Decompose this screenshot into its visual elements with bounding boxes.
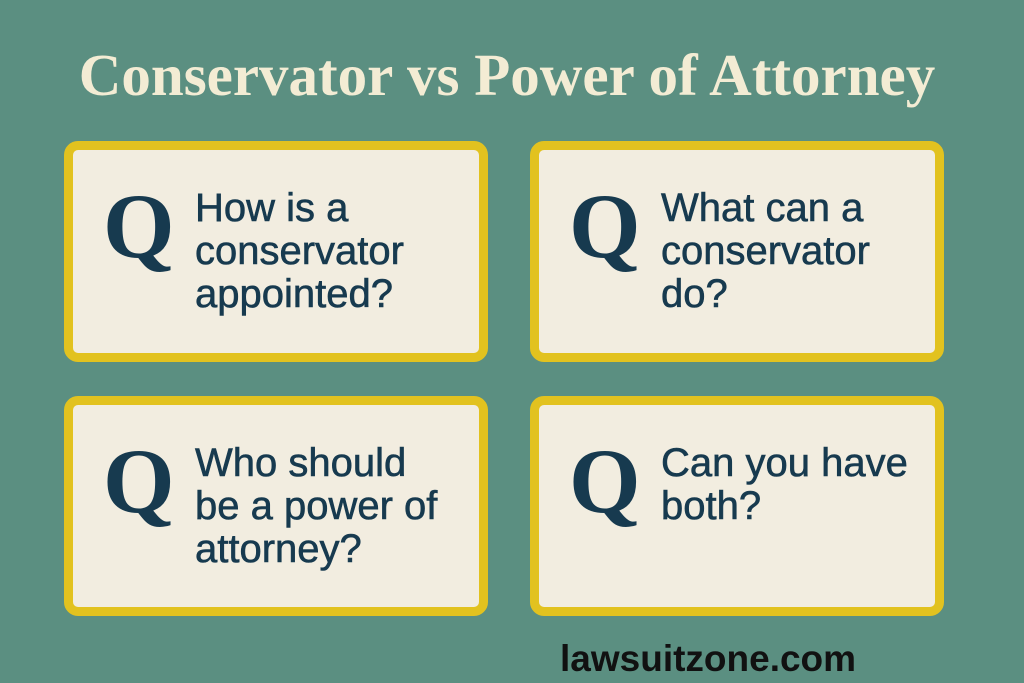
question text: appointed? <box>195 272 393 316</box>
card: can you have both <box>530 396 944 616</box>
card: what can a conservator do <box>530 141 944 362</box>
question text: What can a <box>661 186 863 230</box>
question text <box>660 186 870 316</box>
question text: Who should <box>195 441 406 485</box>
question text: conservator <box>195 229 404 273</box>
icon: Q: Q <box>103 175 175 277</box>
question text <box>195 186 404 316</box>
card: who should be a power of attorney <box>64 396 488 616</box>
question text: conservator <box>661 229 870 273</box>
question text: do? <box>661 272 728 316</box>
title: Conservator vs Power of Attorney <box>79 42 935 108</box>
question text: be a power of <box>195 484 437 528</box>
question text: Can you have <box>661 441 908 485</box>
question text <box>194 441 438 571</box>
question text: attorney? <box>195 527 362 571</box>
icon: Q: Q <box>103 430 175 532</box>
card: how is a conservator appointed <box>64 141 488 362</box>
icon: Q: Q <box>569 175 641 277</box>
footer url: lawsuitzone.com <box>560 638 856 679</box>
icon: Q: Q <box>569 430 641 532</box>
question text: How is a <box>195 186 348 230</box>
question text: both? <box>661 484 761 528</box>
question text <box>661 441 908 528</box>
